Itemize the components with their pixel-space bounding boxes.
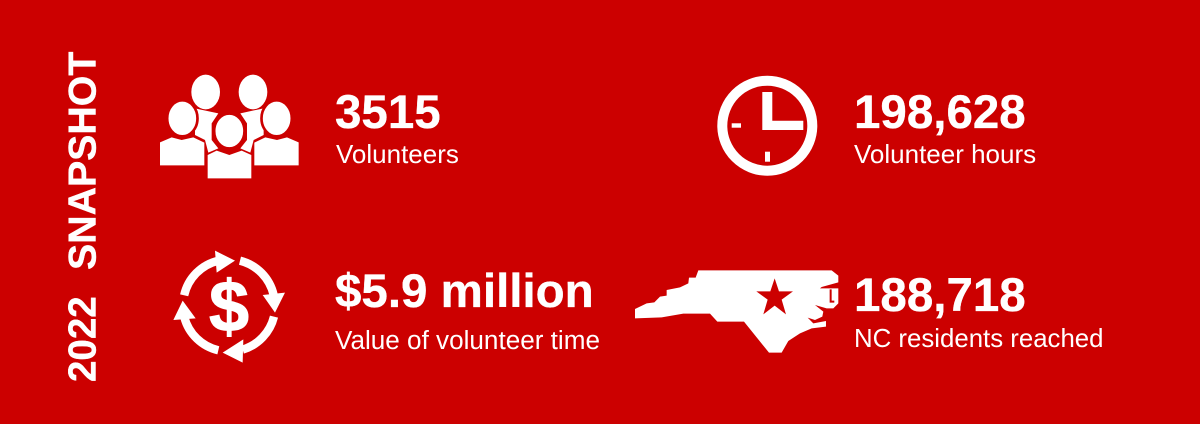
stat: 3515 Volunteers: 3515 bbox=[335, 86, 441, 139]
icon: dollar sign with circular arrows: $ bbox=[209, 267, 249, 347]
stat: 198,628 Volunteer hours: 198,628 bbox=[854, 86, 1026, 139]
icon: group of volunteers bbox=[160, 75, 299, 178]
icon: North Carolina map with star bbox=[635, 270, 838, 353]
icon: dollar sign with circular arrows bbox=[173, 251, 285, 363]
stat: 188,718 NC residents reached: NC residents reached bbox=[854, 325, 1104, 353]
vertical title: 2022 SNAPSHOT: 2022 bbox=[62, 296, 104, 382]
stat: 3515 Volunteers: Volunteers bbox=[336, 139, 459, 169]
stat: 188,718 NC residents reached bbox=[854, 269, 1104, 353]
vertical title: 2022 SNAPSHOT bbox=[60, 52, 104, 382]
stat: 198,628 Volunteer hours bbox=[854, 86, 1036, 169]
stat: $5.9 million Value of volunteer time bbox=[335, 265, 600, 355]
stat: $5.9 million Value of volunteer time: Value of volunteer time bbox=[335, 325, 600, 355]
vertical title: 2022 SNAPSHOT: SNAPSHOT bbox=[60, 52, 104, 270]
stat: $5.9 million Value of volunteer time: $5.9 million bbox=[335, 265, 594, 318]
stat: 3515 Volunteers bbox=[335, 86, 459, 169]
stat: 188,718 NC residents reached: 188,718 bbox=[854, 269, 1026, 322]
stat: 198,628 Volunteer hours: Volunteer hours bbox=[854, 139, 1036, 169]
icon: clock bbox=[722, 81, 812, 171]
